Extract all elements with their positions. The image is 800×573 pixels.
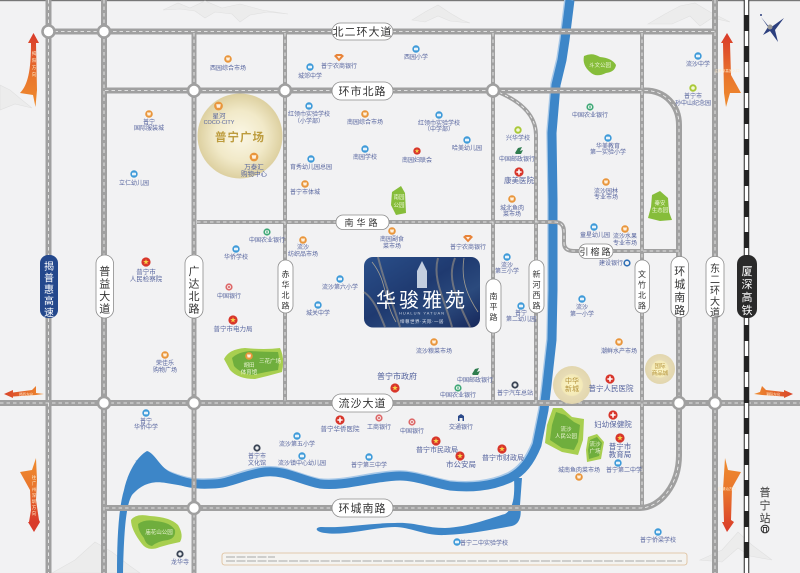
vertical road label: 普益大道: 道 — [99, 302, 110, 316]
POI: 中国农业银行 west: 中国农业银行 — [249, 236, 285, 244]
POI: 胡田体育馆: 体育馆 — [241, 368, 258, 376]
POI: 立仁幼儿园: 立仁幼儿园 — [119, 179, 149, 187]
POI: 中国农业银行 east: 中国农业银行 — [572, 111, 608, 119]
POI: 妇幼保健院: 妇幼保健院 — [594, 419, 632, 429]
POI: 胡田体育馆: 胡田 — [243, 361, 255, 369]
POI: 万泰汇购物中心 — [241, 153, 268, 178]
Puning railway station: 普 — [760, 485, 770, 499]
POI: 流沙中学 — [686, 52, 710, 68]
park: ecological garden — [648, 191, 672, 221]
arrow: to Guangzhou Shenzhen: 深 — [32, 492, 37, 499]
POI: 中国邮政银行 south — [457, 368, 493, 384]
POI: 普宁市政府: 普宁市政府 — [377, 371, 417, 381]
POI: 中国银行 west: 中国银行 — [217, 292, 241, 300]
POI: 流沙第六小学 — [322, 275, 358, 291]
POI: 中国银行 south: 中国银行 — [400, 427, 424, 435]
park: Sanhua Square: 三花广场 — [259, 357, 281, 365]
vertical road label: 广达北路 — [185, 255, 203, 318]
POI: 普宁国际服装城 — [134, 110, 164, 132]
project card: Huajun Yayuan — [364, 257, 480, 328]
POI: 工商银行 — [367, 414, 391, 431]
POI: 兴华学校: 兴华学校 — [506, 134, 530, 142]
horizontal road label: 流沙大道 — [332, 394, 393, 412]
vertical road label: 环城南路: 城 — [674, 278, 685, 291]
POI: 南园副食菜市场: 菜市场 — [383, 242, 401, 250]
arrow: to Jieyang: 阳 — [32, 57, 37, 64]
Zhonghua New Town circle: 中华 — [565, 376, 579, 385]
POI: 普宁华侨中学: 普宁 — [140, 417, 152, 425]
POI: 南园妇联会: 南园妇联会 — [402, 156, 432, 164]
vertical road label: 环城南路: 南 — [674, 291, 685, 304]
park: Liusha People's Park: 人民公园 — [555, 433, 577, 440]
POI: 城郊中学: 城郊中学 — [298, 72, 322, 80]
vertical road label: 普益大道: 普 — [99, 264, 110, 278]
POI: 普宁市电力局: 普宁市电力局 — [214, 324, 252, 333]
POI: 中国农业银行 west — [249, 228, 285, 244]
vertical road label: 南平路: 路 — [490, 312, 498, 322]
POI: 华美教育第一实验小学: 第一实验小学 — [590, 148, 626, 156]
POI: 红领巾实验学校小学部: 红领巾实验学校 — [288, 110, 330, 118]
POI: 哈美幼儿园: 哈美幼儿园 — [452, 144, 482, 152]
POI: 流沙第一小学: 第一小学 — [570, 310, 594, 318]
POI: 普宁市民政局 — [416, 436, 458, 454]
Puning railway station: 宁 — [760, 498, 770, 512]
POI: 普宁第二中学: 普宁第二中学 — [606, 466, 642, 474]
arrow: to Jieyang: 方 — [32, 64, 37, 71]
POI: 龙华寺 — [171, 550, 189, 566]
horizontal road label: 引榕路: 引榕路 — [579, 246, 613, 257]
POI: 中国农业银行 south — [440, 384, 476, 399]
POI: 建设银行 — [599, 259, 630, 267]
park: Mianhuashan: 庙花山公园 — [145, 528, 173, 536]
POI: 流沙园林专业市场 — [594, 178, 618, 201]
vertical road label: 文竹北路: 文 — [638, 269, 646, 279]
park: Douwen — [584, 54, 616, 75]
POI: 普宁人民医院 — [588, 374, 634, 393]
horizontal road label: 环市北路: 环市北路 — [338, 84, 386, 98]
POI: 万泰汇购物中心: 购物中心 — [241, 169, 268, 178]
horizontal road label: 流沙大道: 流沙大道 — [338, 396, 386, 410]
POI: 普宁第二幼儿园 — [506, 302, 536, 323]
POI: 普宁农商银行 north — [321, 54, 357, 70]
park: Liusha People's Park: 流沙 — [560, 425, 572, 433]
POI: 普宁国际服装城: 普宁 — [143, 118, 155, 126]
POI: 市公安局 — [446, 451, 476, 469]
road junctions — [42, 26, 721, 514]
POI: 城南鱼肉菜市场 — [558, 466, 600, 481]
vertical road label: 普益大道: 大 — [99, 289, 110, 303]
POI: 康美医院 — [504, 167, 534, 185]
POI: 荣佳乐购物广场 — [153, 351, 177, 374]
POI: 普宁市民政局: 普宁市民政局 — [416, 445, 458, 454]
vertical road label: 赤华北路: 北 — [282, 291, 290, 300]
POI: 南园学校 — [353, 145, 377, 161]
vertical road label: 赤华北路: 路 — [282, 300, 290, 310]
POI: 红领巾实验学校中学部: 红领巾实验学校 — [418, 119, 460, 127]
park: Liusha People's Park — [545, 408, 584, 455]
POI: 兴华学校 — [506, 126, 530, 142]
river — [117, 0, 570, 573]
POI: 流沙粮菜市场: 流沙粮菜市场 — [416, 347, 452, 355]
POI: 南园综合市场: 南园综合市场 — [347, 118, 383, 126]
POI: 普宁市电力局 — [214, 315, 252, 333]
POI: 流沙第一小学 — [570, 295, 594, 318]
POI: 育秀幼儿园总园 — [290, 155, 332, 171]
Puning railway station — [760, 485, 770, 533]
POI: 流沙纺织品市场 — [288, 236, 318, 258]
horizontal road label: 环城南路: 环城南路 — [338, 502, 386, 515]
horizontal road label: 北二环大道 — [332, 23, 393, 40]
POI: 普宁市财政局 — [482, 444, 524, 462]
vertical road label: 赤华北路 — [278, 260, 293, 313]
vertical road label: 东二环大道: 二 — [710, 275, 720, 286]
POI: 童星幼儿园: 童星幼儿园 — [580, 231, 610, 239]
Puning Plaza district circle — [198, 94, 282, 178]
park: ecological garden: 生态园 — [652, 206, 669, 214]
park: Sanhua Square — [224, 348, 283, 379]
POI: 华美教育第一实验小学: 华美教育 — [596, 142, 620, 150]
POI: 城关中学 — [306, 301, 330, 317]
POI: 流沙第五小学: 流沙第五小学 — [279, 440, 315, 448]
POI: 市公安局: 市公安局 — [446, 459, 476, 469]
POI: 南园副食菜市场 — [380, 227, 404, 250]
POI: 流沙第六小学: 流沙第六小学 — [322, 283, 358, 291]
POI: 流沙粮菜市场 — [416, 338, 452, 355]
Puning railway station: 站 — [760, 511, 770, 525]
POI: 西园综合市场: 西园综合市场 — [210, 64, 246, 72]
POI: 中国邮政银行 north — [499, 147, 535, 163]
vertical road label: 揭普惠高速: 速 — [44, 307, 54, 319]
POI: 普宁市人民检察院: 普宁市 — [136, 267, 156, 276]
arrow: to Jieyang: 向 — [32, 71, 37, 77]
vertical road label: 揭普惠高速: 惠 — [44, 283, 54, 296]
POI: 立仁幼儿园 — [119, 170, 149, 187]
Zhonghua New Town circle — [553, 366, 591, 404]
vertical road label: 东二环大道: 东 — [710, 262, 720, 275]
vertical road label: 南平路: 南 — [490, 291, 498, 301]
vertical road label: 文竹北路: 路 — [638, 300, 646, 310]
POI: 普宁市文化馆: 文化馆 — [248, 459, 266, 467]
POI: 中国农业银行 east — [572, 103, 608, 119]
POI: 中国银行 west — [217, 283, 241, 300]
POI: 普宁国际服装城: 国际服装城 — [134, 124, 164, 132]
arrow: to Guangzhou Shenzhen: 向 — [32, 510, 37, 516]
POI: 流沙纺织品市场: 纺织品市场 — [288, 250, 318, 258]
POI: 潮鲜水产市场 — [601, 338, 637, 355]
vertical road label: 揭普惠高速: 揭 — [44, 260, 54, 273]
arrow: to Guangzhou Shenzhen — [20, 458, 40, 532]
POI: 中国邮政银行 south: 中国邮政银行 — [457, 376, 493, 384]
POI: 普宁农商银行 south — [450, 235, 486, 251]
POI: 流沙水果专业市场 — [613, 225, 637, 247]
POI: 普宁第二中学 — [606, 459, 642, 474]
vertical road label: 厦深高铁: 深 — [742, 278, 752, 291]
POI: 普宁华侨中学: 华侨中学 — [134, 423, 158, 431]
vertical road label: 广达北路: 广 — [188, 265, 200, 278]
Puning Plaza district circle: 普宁广场 — [215, 130, 265, 144]
vertical road label: 东二环大道: 环 — [710, 286, 720, 297]
arrow: to Guangzhou Shenzhen: 方 — [32, 504, 37, 511]
POI: 普宁市财政局: 普宁市财政局 — [482, 453, 524, 462]
park: Liusha Square — [586, 434, 604, 462]
POI: 城郊中学 — [298, 63, 322, 80]
vertical road label: 东二环大道 — [706, 256, 724, 319]
vertical road label: 新河西路: 河 — [532, 280, 540, 290]
POI: 流沙第三小学: 流沙 — [501, 261, 513, 269]
POI: 流沙中学: 流沙中学 — [686, 60, 710, 68]
POI: 城南鱼肉菜市场: 城南鱼肉菜市场 — [558, 466, 600, 474]
vertical road label: 南平路: 平 — [490, 302, 498, 312]
project card: Huajun Yayuan: 华骏雅苑 — [376, 289, 468, 312]
vertical road label: 广达北路: 北 — [188, 290, 200, 303]
International Commodity City circle: 商品城 — [652, 369, 669, 377]
POI: 哈美幼儿园 — [452, 136, 482, 152]
POI: 万泰汇购物中心: 万泰汇 — [244, 162, 264, 171]
POI: 华侨学校 — [224, 245, 248, 261]
POI: 普宁华侨中学 — [134, 409, 158, 431]
POI: 潮鲜水产市场: 潮鲜水产市场 — [601, 347, 637, 355]
park: Liusha Square: 广场 — [589, 447, 601, 455]
POI: 普宁农商银行 north: 普宁农商银行 — [321, 62, 357, 70]
POI: 普宁第三中学: 普宁第三中学 — [351, 461, 387, 469]
arrow: to Xiamen Shenzhen expressway — [714, 33, 741, 107]
POI: 西园综合市场 — [210, 55, 246, 72]
POI: 城北鱼肉菜市场 — [500, 195, 524, 218]
icon: compass — [760, 14, 784, 42]
park: ecological garden: 秦安 — [654, 199, 666, 207]
vertical road label: 赤华北路: 华 — [282, 280, 290, 290]
high-speed rail line — [744, 0, 749, 573]
vertical road label: 东二环大道: 大 — [710, 295, 720, 308]
POI: 荣佳乐购物广场: 购物广场 — [153, 366, 177, 374]
vertical road label: 新河西路: 路 — [532, 300, 540, 310]
POI: 中国农业银行 south: 中国农业银行 — [440, 391, 476, 399]
POI: 红领巾实验学校中学部 — [418, 111, 460, 133]
POI: 红领巾实验学校中学部: （中学部） — [424, 125, 454, 133]
POI: 普宁侨梁学校 — [640, 528, 676, 544]
POI: 康美医院: 康美医院 — [504, 175, 534, 185]
vertical road label: 新河西路 — [529, 260, 544, 313]
POI: 普宁汽车总站: 普宁汽车总站 — [497, 389, 533, 397]
POI: 星河 COCO CITY: COCO·CITY — [204, 120, 235, 126]
POI: 流沙第一小学: 流沙 — [576, 303, 588, 311]
vertical road label: 厦深高铁: 厦 — [742, 265, 752, 278]
vertical road label: 揭普惠高速 — [40, 255, 58, 319]
POI: 南园学校: 南园学校 — [353, 153, 377, 161]
POI: 中国邮政银行 north: 中国邮政银行 — [499, 155, 535, 163]
POI: 胡田体育馆 — [241, 352, 258, 376]
POI: 普宁人民医院: 普宁人民医院 — [588, 383, 634, 393]
POI: 建设银行: 建设银行 — [599, 259, 623, 267]
POI: 普宁市孙中山纪念园: 普宁市 — [684, 92, 702, 100]
park: Mianhuashan — [131, 515, 182, 549]
POI: 普宁汽车总站 — [497, 381, 533, 397]
park: Nanyuan — [391, 186, 406, 215]
vertical road label: 南平路 — [486, 279, 501, 333]
POI: 华美教育第一实验小学 — [590, 134, 626, 156]
POI: 南园副食菜市场: 南园副食 — [380, 235, 404, 243]
POI: 交通银行 — [449, 414, 473, 431]
arrow: east direction: 潮阳方向 — [766, 392, 780, 396]
vertical road label: 文竹北路 — [635, 260, 650, 313]
park: Nanyuan: 公园 — [393, 202, 405, 209]
POI: 普宁市文化馆 — [248, 444, 266, 467]
vertical road label: 广达北路: 达 — [188, 278, 200, 290]
POI: 普宁市教育局 — [609, 433, 632, 459]
POI: 普宁市人民检察院 — [130, 257, 163, 283]
POI: 流沙水果专业市场: 流沙水果 — [613, 232, 637, 240]
arrow: to Guangzhou Shenzhen: 往 — [32, 474, 37, 480]
POI: 普宁第三中学 — [351, 453, 387, 469]
POI: 流沙镇中心幼儿园 — [278, 452, 326, 467]
POI: 普宁二中实验学校 — [453, 538, 508, 547]
POI: 西园小学: 西园小学 — [404, 53, 428, 61]
POI: 流沙园林专业市场: 专业市场 — [594, 193, 618, 201]
arrow: to Shantou: 往潮汕方向 — [718, 486, 736, 491]
POI: 交通银行: 交通银行 — [449, 423, 473, 431]
vertical road label: 揭普惠高速: 普 — [44, 272, 54, 284]
POI: 流沙第五小学 — [279, 432, 315, 448]
POI: 流沙园林专业市场: 流沙园林 — [594, 187, 618, 195]
POI: 星河 COCO CITY: 星河 — [212, 112, 226, 120]
POI: 育秀幼儿园总园: 育秀幼儿园总园 — [290, 163, 332, 171]
vertical road label: 揭普惠高速: 高 — [44, 294, 54, 308]
POI: 普宁二中实验学校: 普宁二中实验学校 — [460, 539, 508, 547]
vertical road label: 普益大道 — [96, 255, 114, 318]
project card: Huajun Yayuan: HUALUN YATUAN — [399, 310, 445, 316]
vertical road label: 文竹北路: 北 — [638, 291, 646, 300]
arrow: to Guangzhou Shenzhen: 广 — [32, 480, 37, 487]
Zhonghua New Town circle: 新城 — [565, 384, 579, 393]
vertical road label: 文竹北路: 竹 — [638, 280, 646, 290]
POI: 流沙水果专业市场: 专业市场 — [613, 239, 637, 247]
park: Douwen: 斗文公园 — [589, 61, 611, 69]
POI: 城北鱼肉菜市场: 菜市场 — [503, 210, 521, 218]
POI: 龙华寺: 龙华寺 — [171, 558, 189, 566]
POI: 华侨学校: 华侨学校 — [224, 253, 248, 261]
POI: 普宁侨梁学校: 普宁侨梁学校 — [640, 536, 676, 544]
POI: 城关中学: 城关中学 — [306, 309, 330, 317]
arrow: east direction — [754, 386, 793, 398]
POI: 流沙第三小学 — [495, 253, 519, 275]
POI: 童星幼儿园 — [580, 223, 610, 239]
arrow: west direction: 揭西方向 — [19, 392, 33, 396]
POI: 城北鱼肉菜市场: 城北鱼肉 — [500, 204, 524, 212]
vertical road label: 环城南路 — [671, 256, 688, 318]
arrow: to Shantou — [718, 458, 741, 532]
POI: 西园小学 — [404, 45, 428, 61]
POI: 流沙纺织品市场: 流沙 — [297, 243, 309, 251]
vertical road label: 普益大道: 益 — [99, 276, 110, 290]
POI: 普宁华侨医院 — [320, 415, 360, 433]
project card: Huajun Yayuan: 缔尊世界·天际·一居 — [400, 318, 444, 325]
vertical road label: 环城南路: 环 — [674, 266, 685, 278]
vertical road label: 新河西路: 新 — [532, 269, 540, 279]
POI: 普宁华侨医院: 普宁华侨医院 — [320, 424, 360, 433]
POI: 星河 COCO CITY — [204, 102, 235, 126]
vertical road label: 赤华北路: 赤 — [282, 270, 290, 279]
POI: 红领巾实验学校小学部 — [288, 102, 330, 125]
POI: 普宁第二幼儿园: 第二幼儿园 — [506, 315, 536, 323]
park: Liusha Square: 流沙 — [589, 440, 601, 448]
POI: 普宁市文化馆: 普宁市 — [248, 452, 266, 460]
POI: 普宁市孙中山纪念园 — [675, 84, 711, 107]
horizontal road label: 南华路 — [336, 215, 389, 230]
POI: 普宁第二幼儿园: 普宁 — [515, 309, 527, 317]
POI: 南园综合市场 — [347, 110, 383, 126]
POI: 普宁市人民检察院: 人民检察院 — [130, 274, 163, 283]
top edge line — [0, 0, 800, 1]
horizontal road label: 引榕路 — [579, 244, 613, 258]
POI: 普宁市教育局: 教育局 — [609, 449, 631, 459]
horizontal road label: 北二环大道: 北二环大道 — [332, 24, 392, 38]
vertical road label: 厦深高铁 — [737, 255, 757, 318]
vertical road label: 新河西路: 西 — [532, 291, 540, 300]
disclaimer box — [222, 553, 687, 565]
POI: 普宁市孙中山纪念园: 孙中山纪念园 — [675, 99, 711, 107]
POI: 妇幼保健院 — [594, 410, 632, 429]
horizontal road label: 环城南路 — [332, 499, 393, 517]
vertical road label: 厦深高铁: 高 — [742, 290, 752, 304]
horizontal road label: 环市北路 — [332, 82, 393, 100]
arrow: to Guangzhou Shenzhen: 州 — [32, 487, 37, 492]
International Commodity City circle — [645, 354, 675, 384]
POI: 流沙镇中心幼儿园: 流沙镇中心幼儿园 — [278, 459, 326, 467]
park: Nanyuan: 南园 — [393, 193, 405, 201]
horizontal road label: 南华路: 南华路 — [344, 217, 381, 228]
POI: 普宁市教育局: 普宁市 — [609, 441, 632, 451]
International Commodity City circle: 国际 — [654, 362, 666, 370]
arrow: to Xiamen Shenzhen expressway: 往厦深高速入口 — [714, 68, 740, 73]
POI: 南园妇联会 — [402, 147, 432, 164]
arrow: to Jieyang — [20, 33, 39, 107]
vertical road label: 广达北路: 路 — [188, 302, 200, 316]
POI: 普宁农商银行 south: 普宁农商银行 — [450, 243, 486, 251]
vertical road label: 厦深高铁: 铁 — [742, 304, 752, 317]
POI: 荣佳乐购物广场: 荣佳乐 — [156, 359, 174, 367]
POI: 工商银行: 工商银行 — [367, 423, 391, 431]
POI: 普宁市体城: 普宁市体城 — [290, 188, 320, 196]
arrow: to Guangzhou Shenzhen: 圳 — [32, 498, 37, 505]
vertical road label: 环城南路: 路 — [674, 304, 685, 317]
vertical road label: 东二环大道: 道 — [710, 306, 720, 319]
POI: 中国银行 south — [400, 418, 424, 435]
POI: 流沙第三小学: 第三小学 — [495, 267, 519, 275]
POI: 普宁市政府 — [377, 371, 417, 393]
arrow: to Jieyang: 揭 — [32, 50, 37, 57]
POI: 红领巾实验学校小学部: （小学部） — [294, 117, 324, 125]
arrow: west direction — [4, 386, 44, 398]
POI: 普宁市体城 — [290, 180, 320, 196]
